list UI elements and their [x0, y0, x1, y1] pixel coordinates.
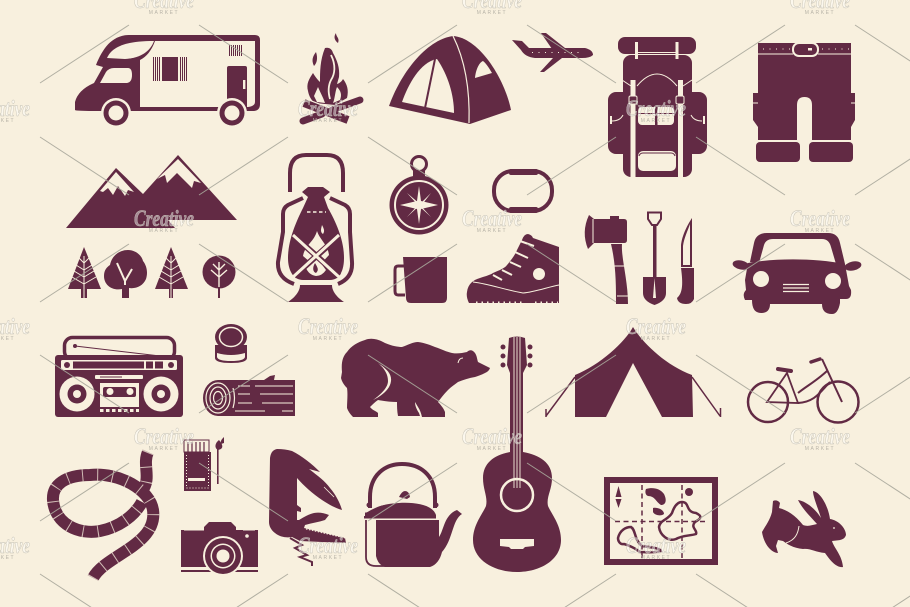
watermark text: Creative Market: MARKET: [805, 10, 835, 16]
icon: circle tree: [202, 256, 236, 298]
icon: pine tree: [68, 247, 101, 298]
watermark text: Creative Market: MARKET: [149, 228, 179, 234]
watermark text: Creative Market: MARKET: [477, 10, 507, 16]
watermark text: Creative Market: Creative: [298, 96, 358, 121]
watermark text: Creative Market: MARKET: [313, 118, 343, 124]
icon: mountains: [66, 155, 237, 228]
icon: camera: [181, 522, 258, 576]
icon: compass: [390, 156, 448, 234]
icon: motorhome: [75, 35, 260, 128]
watermark text: Creative Market: Creative: [626, 533, 686, 558]
icon: kettle: [364, 464, 462, 567]
icon: axe: [585, 215, 628, 304]
icon: airplane: [512, 33, 593, 72]
watermark text: Creative Market: MARKET: [149, 10, 179, 16]
icon: campfire: [301, 33, 360, 121]
icon: boombox: [55, 338, 183, 417]
watermark text: Creative Market: MARKET: [641, 336, 671, 342]
icon: big camp tent: [546, 327, 720, 417]
icon: shovel: [643, 212, 666, 305]
icon: bicycle: [748, 359, 858, 422]
watermark text: Creative Market: MARKET: [641, 118, 671, 124]
watermark text: Creative Market: Creative: [626, 96, 686, 121]
icon: wooden log: [203, 375, 295, 416]
watermark text: Creative Market: Creative: [462, 206, 522, 231]
icon: backpack: [608, 37, 707, 177]
icon: trail map: [607, 480, 715, 562]
watermark text: Creative Market: Creative: [298, 533, 358, 558]
watermark text: Creative Market: Creative: [790, 206, 850, 231]
watermark text: Creative Market: Creative: [134, 206, 194, 231]
icon: carabiner: [494, 169, 552, 213]
watermark text: Creative Market: MARKET: [313, 555, 343, 561]
icon: shorts: [753, 43, 855, 162]
icon: rabbit: [762, 491, 846, 567]
watermark text: Creative Market: MARKET: [805, 228, 835, 234]
watermark text: Creative Market: Creative: [298, 314, 358, 339]
watermark text: Creative Market: Creative: [626, 314, 686, 339]
icon: guitar: [473, 336, 561, 572]
icon: pine tree: [155, 247, 188, 298]
watermark text: Creative Market: MARKET: [641, 555, 671, 561]
icon: rope: [53, 452, 153, 578]
watermark text: Creative Market: MARKET: [477, 446, 507, 452]
watermark text: Creative Market: Creative: [134, 424, 194, 449]
icon: dome tent: [389, 36, 511, 124]
icon: bear: [341, 339, 490, 417]
icon: knife: [677, 218, 694, 304]
icon: round tree: [104, 250, 147, 298]
icon: oil lantern: [278, 155, 352, 302]
icon: mug: [395, 257, 447, 303]
watermark text: Creative Market: Creative: [790, 424, 850, 449]
icon: multi-tool pocket knife: [269, 449, 346, 566]
watermark text: Creative Market: Creative: [462, 424, 522, 449]
watermark text: Creative Market: MARKET: [149, 446, 179, 452]
icon: matchbox: [184, 437, 224, 491]
icon: hiking boot: [467, 234, 559, 303]
watermark text: Creative Market: MARKET: [313, 336, 343, 342]
watermark text: Creative Market: MARKET: [805, 446, 835, 452]
icon: tin can: [215, 324, 247, 363]
watermark text: Creative Market: MARKET: [477, 228, 507, 234]
icon: car: [732, 233, 862, 314]
